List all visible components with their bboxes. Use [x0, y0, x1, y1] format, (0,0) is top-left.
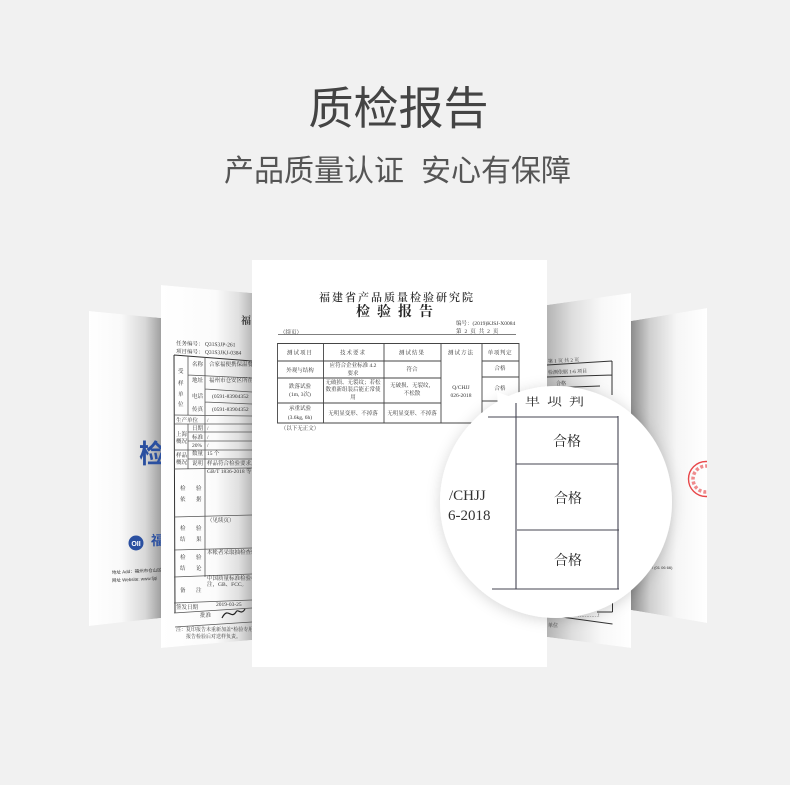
red stamp [688, 460, 707, 498]
inspection table: 承重试验 [289, 404, 311, 412]
report table: 验 [196, 553, 202, 561]
signature [222, 609, 245, 618]
report table: 名称 [192, 360, 204, 368]
report table: 标准 [192, 433, 204, 441]
report table: 2019-03-25 [216, 602, 242, 608]
inspection table: 外观与结构 [286, 366, 314, 374]
report table: 概况 [176, 437, 188, 445]
report table: 验 [196, 524, 202, 532]
panel: centre test report [252, 260, 547, 667]
report table: 据 [196, 495, 202, 503]
report table: / [207, 435, 209, 441]
enlarged method text [448, 488, 490, 524]
report table: 生产单位 [176, 416, 199, 424]
inspection table: (1m, 3次) [289, 390, 311, 398]
report table: 样 [178, 379, 184, 387]
report title: 检验报告 [356, 303, 440, 320]
enlarged table lines [488, 403, 619, 589]
cover contact text: 网址 Website: www.fjqi [112, 575, 157, 584]
report table: 批准 [200, 611, 212, 619]
report table: 位 [178, 400, 184, 408]
inspection table: 应符合企业标准 4.2 [330, 361, 377, 369]
magnifier circle [440, 386, 672, 618]
report table: 检 [180, 524, 186, 532]
panel: second left test report [161, 285, 260, 648]
subtitle: 安心有保障 [421, 155, 571, 188]
enlarged results: 合格 [554, 490, 582, 507]
report table: 单 [178, 390, 184, 398]
panel: second right test report [547, 293, 631, 648]
inspection table: 单项判定 [488, 348, 512, 356]
report table: 检 [180, 484, 186, 492]
inspection table: 测试方法 [448, 348, 474, 356]
inspection table: 无破损、无裂纹， [390, 381, 434, 389]
report table: (0591-83904352 [212, 406, 249, 413]
inspection table: 无明显变形、不掉落 [328, 409, 378, 417]
small footer text: / (01 06 66) [652, 565, 673, 570]
report table [174, 339, 260, 640]
inspection table: 用 [350, 393, 356, 401]
report table: 数量 [192, 449, 204, 457]
report table: 备 [180, 586, 186, 594]
report table: 注，GB、FCC。 [207, 580, 247, 588]
report table: 论 [196, 564, 202, 572]
report table: 依 [180, 495, 186, 503]
report table: (0591-83904352 [212, 393, 249, 400]
report table: 15 个 [207, 449, 220, 457]
report table: 中国质量标准检验机 [207, 574, 257, 582]
report table fragment: 检测依据 1-6 项目 [548, 368, 587, 376]
title: 质检报告 [308, 83, 489, 134]
inspection table: 符合 [406, 365, 418, 373]
inspection table: 测试项目 [287, 348, 313, 356]
inspection table: 无破损、无裂纹；若松 [325, 378, 381, 386]
inspection table: 合格 [494, 384, 506, 392]
report heading fragment: 福 [241, 314, 251, 327]
report table: 样品符合检验要求。 [207, 459, 257, 467]
inspection table: （以下无正文） [281, 424, 319, 432]
cover contact text: 地址 Add：福州市仓山区 [112, 566, 162, 576]
enlarged method text: 6-2018 [448, 508, 490, 524]
report table: 结 [180, 535, 186, 543]
report table: / [207, 443, 209, 449]
report table: 20% [192, 443, 202, 449]
report table: （见续页） [207, 516, 235, 524]
report table: 说明 [192, 459, 204, 467]
inspection table: 测试结果 [399, 348, 425, 356]
enlarged results [553, 433, 582, 569]
report table fragment: 合格 [556, 380, 566, 387]
report table: 检 [180, 553, 186, 561]
report table: 上海 [176, 430, 188, 438]
report table fragment: …………! [578, 614, 600, 619]
report table: 合家福便携保温餐盒 [209, 360, 259, 368]
inspection table: 无明显变形、不掉落 [387, 409, 437, 417]
report table: 注：复印报告未重新加盖“检验专用章” [176, 626, 260, 633]
inspection table: (3.6kg, 6h) [288, 414, 312, 421]
inspection table: 026-2018 [450, 393, 472, 399]
icon: company logo: 福 [151, 533, 164, 548]
icon: company logo: OII [131, 541, 141, 548]
inspection table [278, 344, 519, 432]
enlarged method text: /CHJJ [449, 488, 486, 504]
report table: 电话 [192, 392, 204, 400]
magnifier pointer notch [497, 392, 514, 410]
report table: 果 [196, 535, 202, 543]
inspection table: 要求 [347, 369, 359, 377]
report table: 样品 [176, 451, 188, 459]
inspection table: 跌落试验 [289, 382, 311, 390]
report table: 本帐者采取抽检查验 [207, 548, 257, 556]
subtitle: 产品质量认证 [224, 155, 404, 188]
report table: 报告检验后对送样负责。 [186, 633, 241, 640]
report table fragment: 第 1 页 共 2 页 [548, 356, 579, 365]
enlarged results: 合格 [553, 433, 581, 450]
icon: company logo [128, 534, 161, 550]
report numbers: （续页） [280, 328, 302, 336]
panel: far left report cover [89, 311, 165, 626]
report table: GB/T 1836-2018 等 [207, 467, 252, 475]
report numbers: 编号：(2019)KJSJ-X0084 [456, 319, 516, 327]
inspection table: 不松散 [404, 389, 421, 397]
report table: 日期 [192, 424, 204, 432]
report table: 受 [178, 367, 184, 375]
report table: 验 [196, 484, 202, 492]
report table fragment [547, 356, 612, 629]
inspection table: Q/CHJJ [452, 385, 471, 391]
panel: far right report with stamp [631, 308, 707, 623]
report table: / [207, 426, 209, 432]
enlarged header fragment: 单项判 [525, 392, 591, 409]
cover contact text [112, 568, 161, 582]
institute name: 福建省产品质量检验研究院 [319, 290, 475, 304]
report table fragment: 单位 [548, 622, 558, 629]
report table: / [207, 418, 209, 424]
inspection table: 合格 [494, 364, 506, 372]
report table: 项目编号： Q31S3JKJ-0384 [176, 347, 242, 357]
report table: 结 [180, 564, 186, 572]
report table: 概况 [176, 458, 188, 466]
inspection table: 技术要求 [340, 348, 366, 356]
report table: 地址 [192, 376, 204, 384]
report table: 注 [196, 586, 202, 594]
subtitle [224, 155, 571, 188]
enlarged results: 合格 [554, 552, 582, 569]
cover heading fragment: 检 [139, 439, 165, 469]
report table: 签发日期 [176, 603, 199, 611]
report numbers: 第 2 页 共 2 页 [456, 327, 499, 335]
report numbers [280, 319, 516, 336]
report table: 福州市仓安区所在路 [209, 376, 259, 384]
inspection table: 数重新组装后能正常使 [325, 385, 381, 393]
report table: 传真 [192, 405, 204, 413]
report table: 任务编号： Q31S3JP-261 [176, 339, 236, 349]
